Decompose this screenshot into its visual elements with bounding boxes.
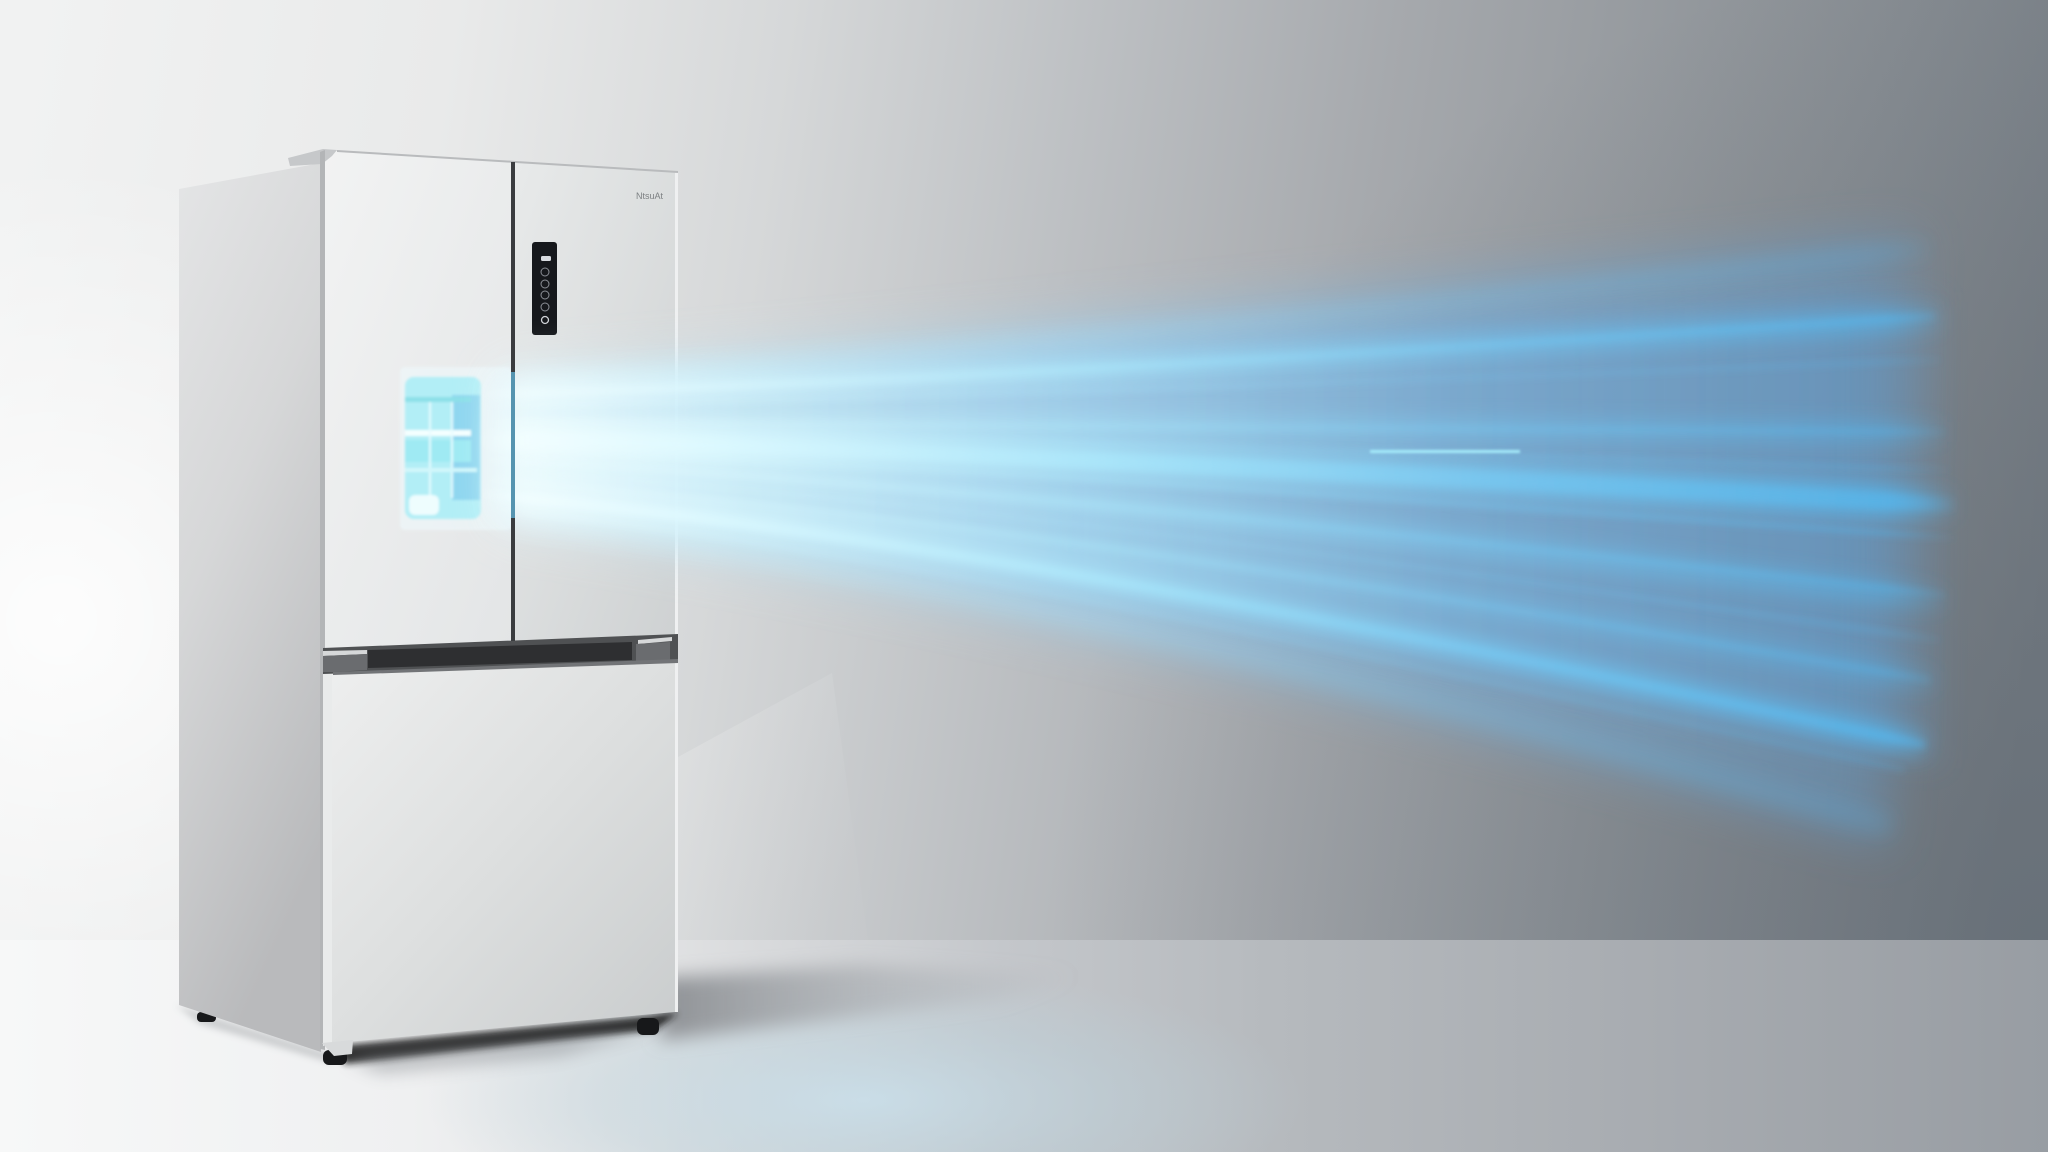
refrigerator: [179, 149, 678, 1065]
brand logo: NtsuAt: [636, 191, 663, 202]
feet: [197, 1012, 659, 1065]
door top edge: [337, 150, 678, 173]
top trim: [288, 149, 337, 166]
right door edge: [675, 171, 678, 1012]
door divider with glow: [511, 162, 515, 641]
lower door left highlight: [323, 673, 332, 1046]
right upper door: [515, 162, 678, 641]
control panel: [532, 242, 557, 335]
metal corner: [322, 1040, 353, 1056]
lower door: [325, 662, 675, 1044]
frosted window frame: [400, 367, 512, 530]
light shape on wall: [678, 673, 868, 941]
bright streaks: [480, 316, 1956, 770]
beam base glow: [490, 292, 1945, 770]
left upper door: [323, 150, 512, 648]
centre highlight streak: [1370, 450, 1520, 453]
airflow beam: [480, 228, 1958, 850]
fridge shadow on floor: [176, 965, 1080, 1072]
fridge interior window: [405, 377, 481, 519]
faint outer glow: [490, 228, 1925, 850]
broad streams: [480, 248, 1958, 826]
floor: [0, 940, 2048, 1152]
side panel: [179, 163, 321, 1052]
door edge strip: [320, 150, 325, 1050]
middle band: [323, 634, 678, 675]
